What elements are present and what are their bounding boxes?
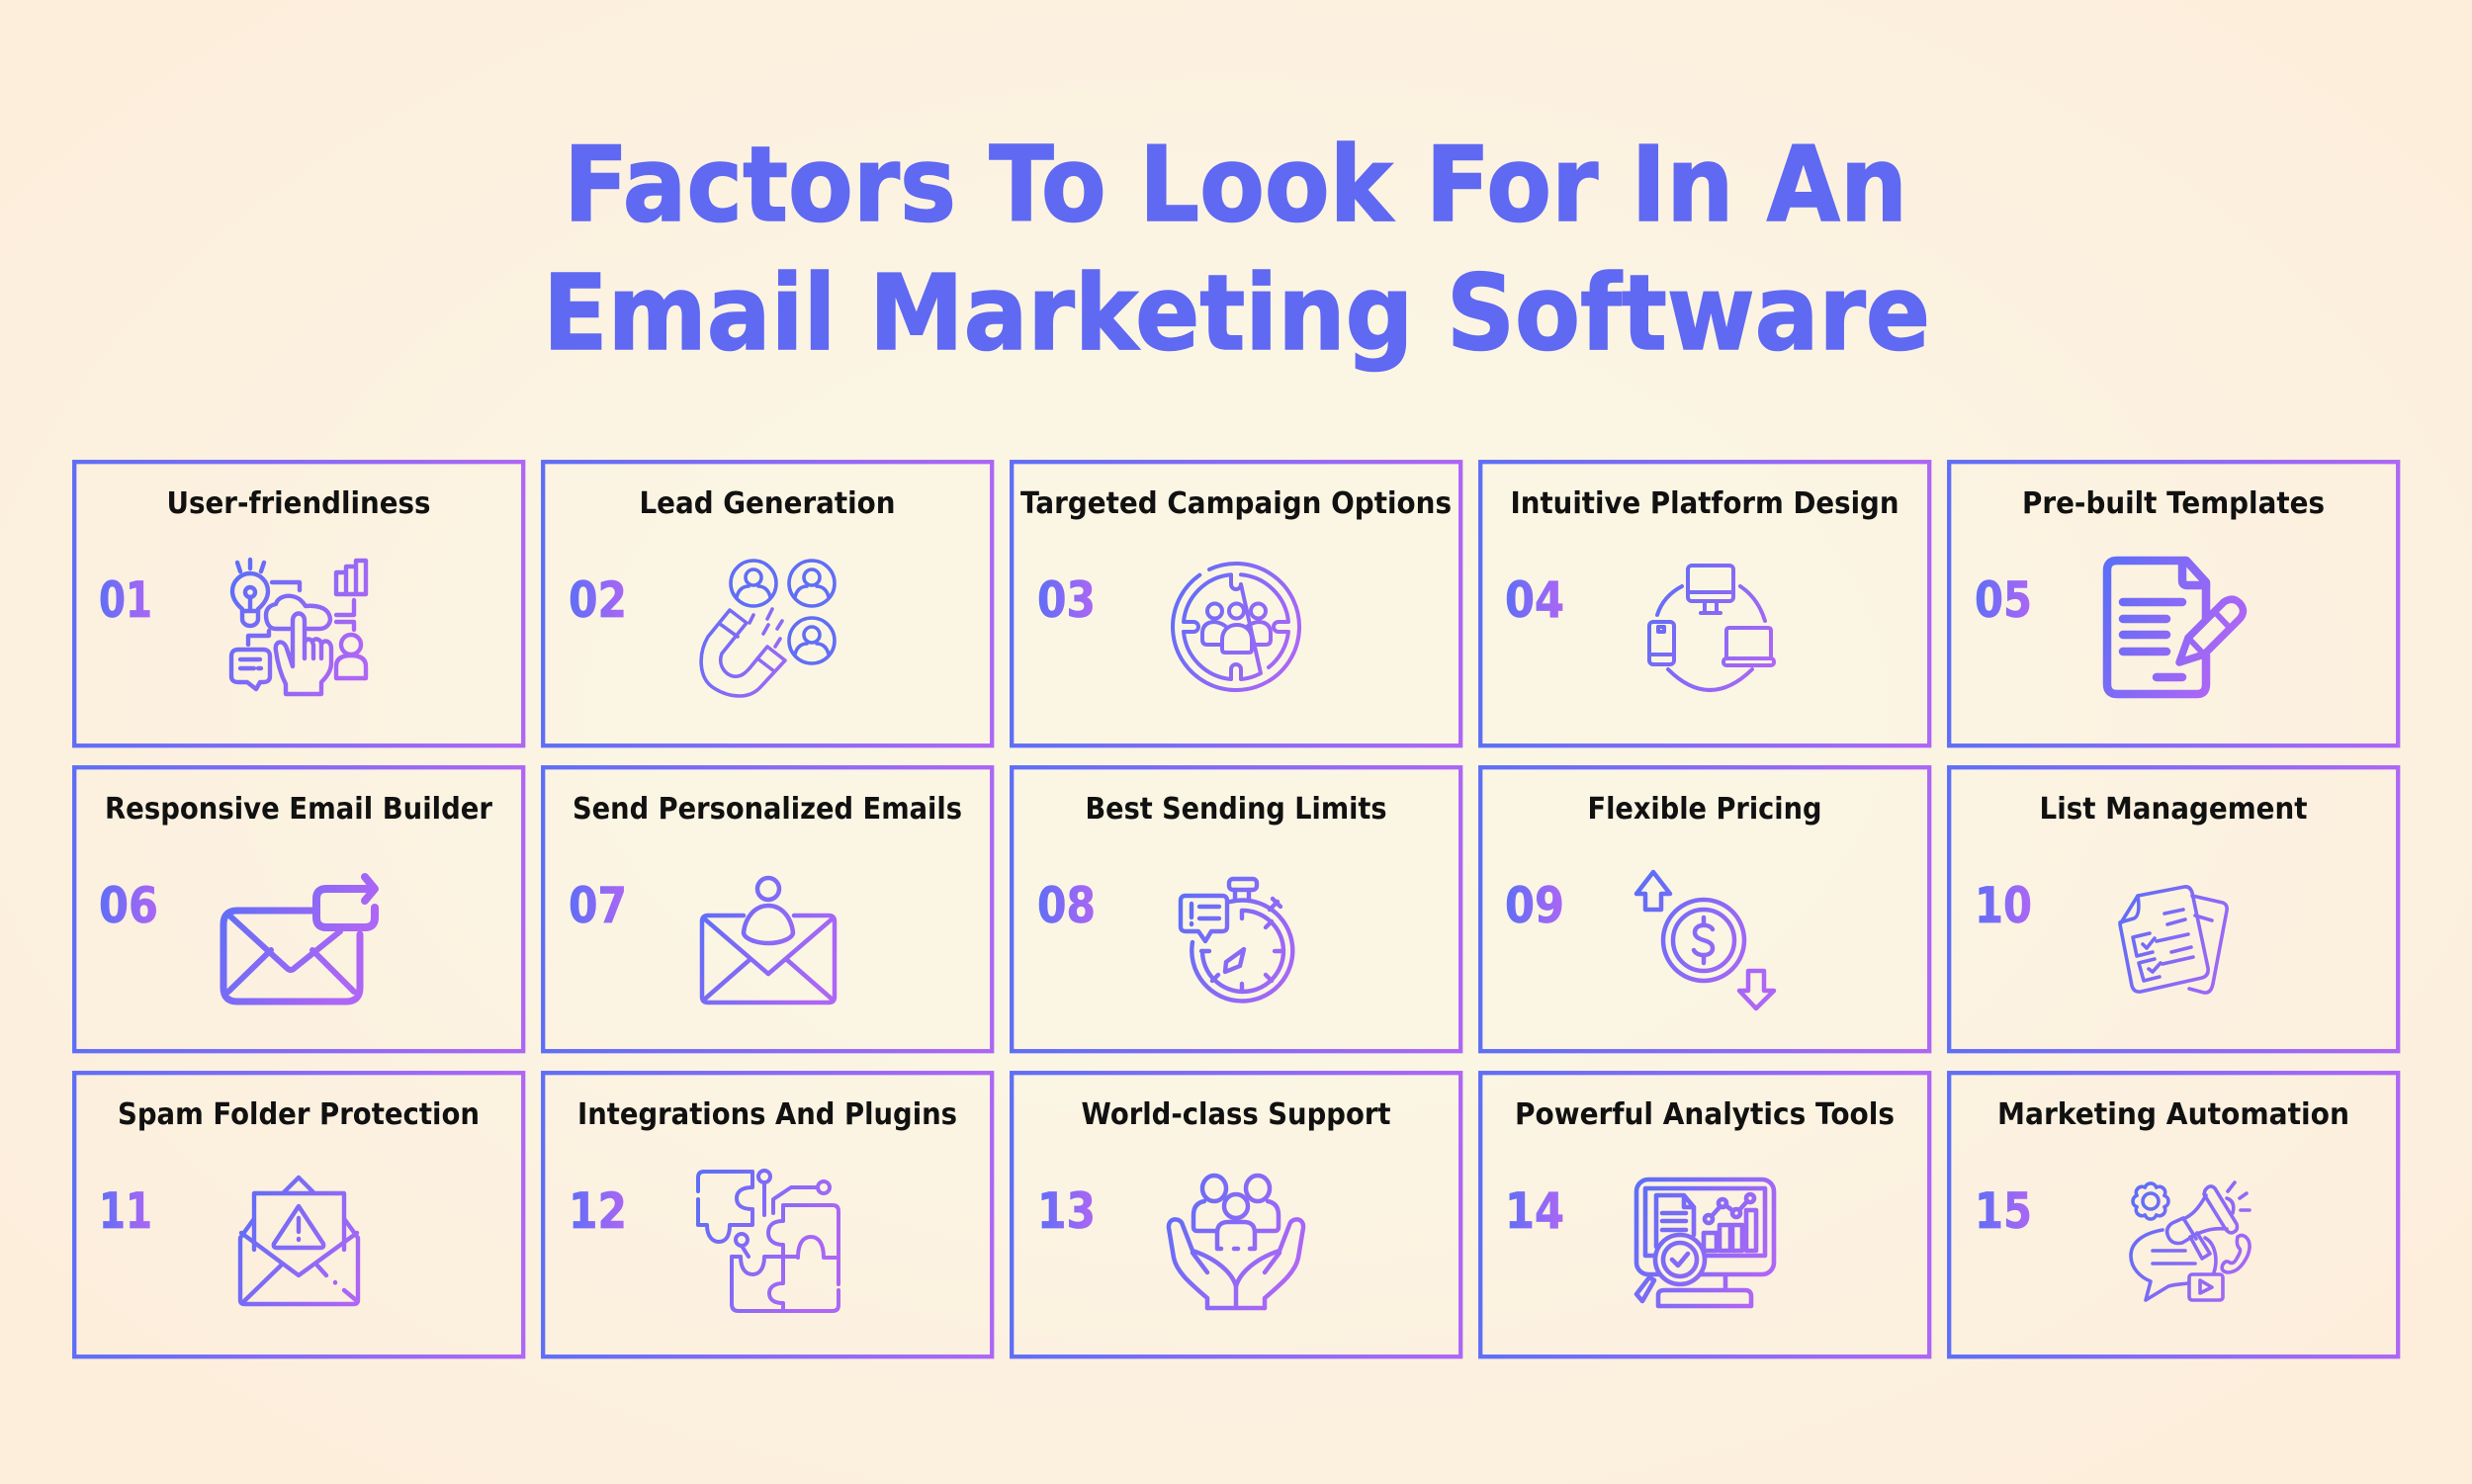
icon: lead magnet [701, 561, 835, 696]
panel: 11 Spam Folder Protection: 11 [99, 1182, 152, 1240]
panel: 14 Powerful Analytics Tools [1480, 1073, 1929, 1356]
panel: 04 Intuitive Platform Design [1480, 462, 1929, 745]
panel: 13 World-class Support: World-class Support [1082, 1097, 1390, 1132]
panel: 01 User-friendliness: User-friendliness [166, 486, 431, 521]
panel: 09 Flexible Pricing: Flexible Pricing [1588, 792, 1821, 827]
icon: checklist papers [2120, 887, 2227, 993]
panel: 04 Intuitive Platform Design: Intuitive Platform Design [1511, 486, 1898, 521]
panel: 14 Powerful Analytics Tools: 14 [1505, 1182, 1564, 1240]
icon: cloud touch [231, 560, 366, 694]
panel: 15 Marketing Automation: 15 [1975, 1182, 2032, 1240]
icon: stopwatch [1181, 879, 1292, 1001]
panel: 05 Pre-built Templates: 05 [1975, 571, 2032, 629]
panel: 03 Targeted Campaign Options: 03 [1037, 571, 1096, 629]
panel: 11 Spam Folder Protection [74, 1073, 523, 1356]
icon: forward email [223, 877, 375, 1002]
title [543, 124, 1930, 374]
panel: 02 Lead Generation: 02 [569, 571, 627, 629]
panel: 10 List Management: List Management [2039, 792, 2308, 827]
panel: 15 Marketing Automation: Marketing Automation [1997, 1097, 2349, 1132]
panel: 04 Intuitive Platform Design: 04 [1505, 571, 1564, 629]
panel: 06 Responsive Email Builder: Responsive Email Builder [105, 792, 492, 827]
panel: 10 List Management: 10 [1975, 877, 2032, 934]
panel: 13 World-class Support: 13 [1037, 1182, 1096, 1240]
panel: 05 Pre-built Templates: Pre-built Templates [2022, 486, 2325, 521]
panel: 07 Send Personalized Emails: 07 [569, 877, 627, 934]
panel: 09 Flexible Pricing [1480, 767, 1929, 1051]
panel: 02 Lead Generation [543, 462, 992, 745]
panel: 13 World-class Support [1012, 1073, 1460, 1356]
title: Factors To Look For In An [564, 124, 1907, 245]
icon: personal email [702, 878, 835, 1003]
panel: 08 Best Sending Limits: 08 [1037, 877, 1096, 934]
title: Email Marketing Software [543, 252, 1930, 374]
panel: 02 Lead Generation: Lead Generation [639, 486, 896, 521]
icon: audience target [1173, 564, 1299, 690]
icon: analytics monitor [1636, 1179, 1774, 1306]
icon: hands holding people [1169, 1176, 1303, 1308]
panel: 06 Responsive Email Builder [74, 767, 523, 1051]
icon: megaphone automation [2131, 1182, 2250, 1300]
panel: 09 Flexible Pricing: 09 [1505, 877, 1564, 934]
icon: document and pencil [2107, 561, 2243, 694]
panel: 03 Targeted Campaign Options: Targeted Campaign Options [1020, 486, 1452, 521]
panel: 14 Powerful Analytics Tools: Powerful Analytics Tools [1515, 1097, 1895, 1132]
panel: 07 Send Personalized Emails: Send Personalized Emails [573, 792, 962, 827]
icon: warning envelope [240, 1178, 358, 1304]
panel: 11 Spam Folder Protection: Spam Folder Protection [118, 1097, 480, 1132]
panel: 12 Integrations And Plugins: Integrations And Plugins [577, 1097, 957, 1132]
icon: coin with price arrows [1636, 872, 1774, 1008]
panel: 01 User-friendliness: 01 [99, 571, 152, 629]
panel: 12 Integrations And Plugins [543, 1073, 992, 1356]
icon: puzzle pieces [698, 1171, 839, 1311]
icon: connected devices [1649, 566, 1774, 690]
panel: 03 Targeted Campaign Options [1012, 462, 1460, 745]
panel: 15 Marketing Automation [1949, 1073, 2398, 1356]
panel: 08 Best Sending Limits: Best Sending Limits [1086, 792, 1386, 827]
panel: 05 Pre-built Templates [1949, 462, 2398, 745]
panel: 10 List Management [1949, 767, 2398, 1051]
panel: 08 Best Sending Limits [1012, 767, 1460, 1051]
panel: 01 User-friendliness [74, 462, 523, 745]
panel: 06 Responsive Email Builder: 06 [99, 877, 158, 934]
panel: 07 Send Personalized Emails [543, 767, 992, 1051]
panel: 12 Integrations And Plugins: 12 [569, 1182, 627, 1240]
